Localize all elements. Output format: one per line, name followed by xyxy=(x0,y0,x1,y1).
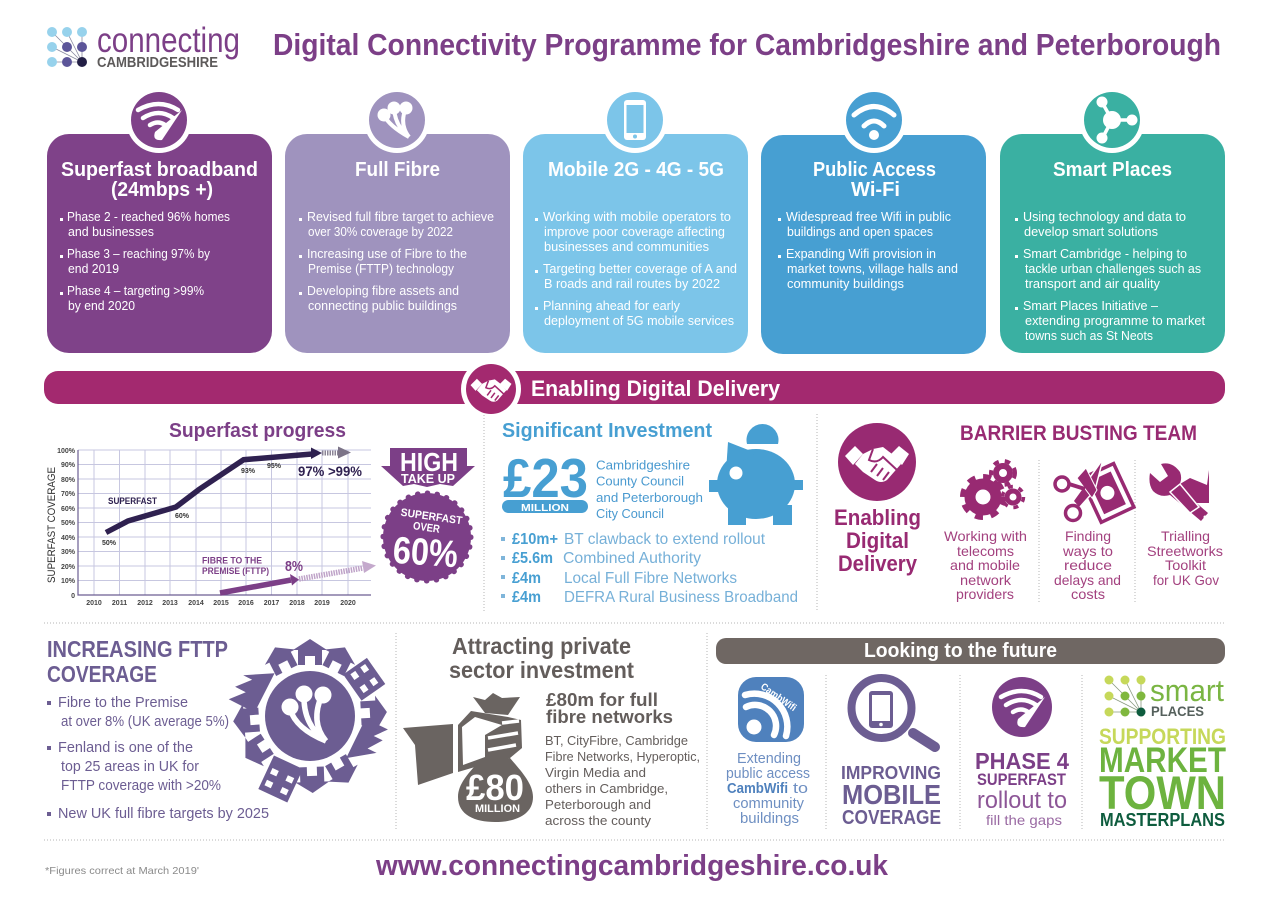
logo: connecting Cambridgeshire: connecting xyxy=(97,21,240,60)
icon: magnifier over phone xyxy=(852,678,935,747)
icon: hand holding money bag xyxy=(403,693,533,822)
panel: public access wi-fi xyxy=(761,87,986,354)
data labels: PREMISE (FTTP) xyxy=(202,566,269,576)
text: trialling streetworks: Streetworks xyxy=(1147,543,1223,559)
line chart: superfast and FTTP coverage xyxy=(46,446,376,607)
heading: superfast broadband: (24mbps +) xyxy=(111,179,213,201)
heading: full fibre: Full Fibre xyxy=(355,159,440,181)
bullet list: wi-fi: community buildings xyxy=(787,277,904,291)
axis labels: 60% xyxy=(61,506,76,513)
panel: mobile xyxy=(523,87,748,353)
data labels: 50% xyxy=(102,540,117,547)
axis labels: 90% xyxy=(61,462,76,469)
bullet list: wi-fi: market towns, village halls and xyxy=(787,262,958,276)
axis labels: 70% xyxy=(61,491,76,498)
text: working with telecoms: network xyxy=(960,572,1012,588)
heading: mobile: Mobile 2G - 4G - 5G xyxy=(548,159,724,181)
heading: barrier busting team: BARRIER BUSTING TEAM xyxy=(960,422,1197,445)
icon: wifi xyxy=(841,87,907,153)
icon: cambwifi: CambWifi xyxy=(758,681,798,714)
bullet list: smart places: Smart Cambridge - helping to xyxy=(1023,247,1187,261)
bullet list: superfast: Phase 3 – reaching 97% by xyxy=(67,247,211,261)
text: private investors: Peterborough and xyxy=(545,798,651,812)
FTTP line xyxy=(220,561,376,593)
bullet list: FTTP xyxy=(47,694,269,822)
badge: superfast over 60%: SUPERFAST xyxy=(400,507,463,527)
icon: hand holding money bag: £80 xyxy=(466,767,524,808)
line chart: superfast and FTTP coverage: 2018 xyxy=(289,600,305,607)
axis labels: 40% xyxy=(61,535,76,542)
panel: cambwifi xyxy=(726,677,810,827)
axis labels: 80% xyxy=(61,477,76,484)
callout: high take up: TAKE UP xyxy=(401,471,455,486)
icon: wrench and hand xyxy=(1149,463,1209,521)
line chart: superfast and FTTP coverage: 2017 xyxy=(264,600,279,607)
text: extending public access: buildings xyxy=(740,811,799,827)
icon: gears xyxy=(963,461,1024,517)
text: supporting market town masterplans: MASTERPLANS xyxy=(1100,810,1225,830)
heading: public access wi-fi xyxy=(813,159,936,201)
data labels: FIBRE TO THE xyxy=(202,556,262,566)
line chart: superfast and FTTP coverage: 2016 xyxy=(238,600,254,607)
text: finding ways: costs xyxy=(1071,586,1105,602)
bullet list: smart places: Using technology and data to xyxy=(1023,210,1186,224)
text: councils: and Peterborough xyxy=(596,491,703,505)
list: funding sources: BT clawback to extend rollout xyxy=(564,531,766,548)
heading: attracting private investment xyxy=(449,633,634,683)
text: private investors xyxy=(545,734,700,828)
line chart: superfast and FTTP coverage: 2015 xyxy=(213,600,229,607)
icon: superfast speedometer wifi xyxy=(126,87,192,153)
text: private investors: others in Cambridge, xyxy=(545,782,668,796)
axis labels: 100% xyxy=(57,448,76,455)
heading: public access wi-fi: Public Access xyxy=(813,159,936,181)
data labels: 60% xyxy=(175,513,190,520)
text: extending public access xyxy=(726,751,810,827)
panel: smart places market towns xyxy=(1099,673,1226,830)
bullet list: full fibre: connecting public buildings xyxy=(308,299,457,313)
banner: enabling digital delivery: Enabling Digital Delivery xyxy=(531,376,781,401)
bullet list: mobile: deployment of 5G mobile services xyxy=(544,314,734,328)
bullet list: mobile: businesses and communities xyxy=(544,240,709,254)
text: supporting market town masterplans: MARKET xyxy=(1099,741,1226,780)
text: private investors: Virgin Media and xyxy=(545,766,646,780)
bullet list: FTTP: Fenland is one of the xyxy=(58,739,193,756)
line chart: superfast and FTTP coverage: 2019 xyxy=(314,600,330,607)
text: working with telecoms: Working with xyxy=(944,528,1027,544)
heading: superfast broadband: Superfast broadband xyxy=(61,159,258,181)
heading: public access wi-fi: Wi-Fi xyxy=(851,179,900,201)
text: improving mobile coverage: IMPROVING xyxy=(841,763,941,783)
badge: superfast over 60%: OVER xyxy=(412,520,441,536)
list: funding sources: Local Full Fibre Networks xyxy=(564,570,737,587)
text: trialling streetworks xyxy=(1147,528,1223,588)
text: supporting market town masterplans: TOWN xyxy=(1099,766,1226,819)
bullet list: superfast: by end 2020 xyxy=(68,299,135,313)
website url: www.connectingcambridgeshire.co.uk xyxy=(375,850,889,882)
bullet list: smart places: extending programme to market xyxy=(1025,314,1206,328)
text: phase 4 rollout: fill the gaps xyxy=(986,812,1062,828)
subheading: 80m for full fibre: £80m for full xyxy=(546,690,658,710)
bullet list: full fibre: Developing fibre assets and xyxy=(307,284,459,298)
bullet list: smart places xyxy=(1015,210,1206,343)
text: finding ways: delays and xyxy=(1054,572,1121,588)
bullet list: full fibre xyxy=(299,210,494,313)
text: councils: City Council xyxy=(596,507,664,521)
text: phase 4 rollout: PHASE 4 xyxy=(975,748,1069,774)
bullet list: superfast: Phase 2 - reached 96% homes xyxy=(67,210,230,224)
text: improving mobile coverage: MOBILE xyxy=(842,779,941,810)
heading: increasing FTTP coverage: COVERAGE xyxy=(47,661,157,687)
bullet list: superfast: and businesses xyxy=(68,225,154,239)
heading: smart places: Smart Places xyxy=(1053,159,1172,181)
logo: connecting Cambridgeshire xyxy=(47,21,240,71)
text: enabling digital delivery: Enabling xyxy=(834,505,921,530)
text: working with telecoms: and mobile xyxy=(950,557,1020,573)
data labels: 97% >99% xyxy=(298,463,363,479)
bullet list: wi-fi: Widespread free Wifi in public xyxy=(786,210,951,224)
heading: increasing FTTP coverage: INCREASING FTTP xyxy=(47,636,228,662)
bullet list: full fibre: Revised full fibre target to achieve xyxy=(307,210,494,224)
text: extending public access: Extending xyxy=(737,751,801,767)
text: councils: Cambridgeshire xyxy=(596,458,690,472)
text: finding ways xyxy=(1054,528,1121,602)
axis labels: 50% xyxy=(61,520,76,527)
superfast line xyxy=(106,446,351,532)
text: councils: County Council xyxy=(596,474,684,488)
bullet list: FTTP: at over 8% (UK average 5%) xyxy=(61,713,229,730)
bullet list: mobile: Targeting better coverage of A and xyxy=(543,262,737,276)
bullet list: smart places: transport and air quality xyxy=(1025,277,1161,291)
text: finding ways: Finding xyxy=(1065,528,1111,544)
axis labels: 0 xyxy=(71,593,75,600)
bullet list: mobile xyxy=(535,210,737,328)
panel: increasing FTTP coverage xyxy=(47,636,388,822)
panel: significant investment xyxy=(501,420,803,606)
bullet list: wi-fi xyxy=(778,210,958,291)
text: councils xyxy=(596,458,703,521)
heading: significant investment: Significant Investment xyxy=(502,420,712,442)
line chart: superfast and FTTP coverage: 2013 xyxy=(162,600,178,607)
heading: attracting private investment: sector investment xyxy=(449,657,634,683)
callout: high take up xyxy=(381,447,475,487)
data labels: SUPERFAST xyxy=(108,496,157,507)
list: funding sources: £4m xyxy=(512,570,541,587)
text: extending public access: public access xyxy=(726,766,810,782)
bullet list: superfast: Phase 4 – targeting >99% xyxy=(67,284,204,298)
text: phase 4 rollout: SUPERFAST xyxy=(977,770,1067,789)
logo: smart places: PLACES xyxy=(1151,703,1204,719)
text: trialling streetworks: Trialling xyxy=(1161,528,1210,544)
icon: superfast speedometer xyxy=(992,677,1052,737)
bullet list: superfast: end 2019 xyxy=(68,262,119,276)
text: trialling streetworks: Toolkit xyxy=(1165,557,1206,573)
list: funding sources: £4m xyxy=(512,589,541,606)
bullet list: FTTP: FTTP coverage with >20% xyxy=(61,777,221,794)
text: private investors: Fibre Networks, Hyperoptic, xyxy=(545,750,700,764)
line chart: superfast and FTTP coverage: 2012 xyxy=(137,600,153,607)
list: funding sources: Combined Authority xyxy=(563,550,701,567)
heading: superfast progress: Superfast progress xyxy=(169,420,346,442)
text: finding ways: reduce xyxy=(1064,557,1112,573)
text: enabling digital delivery: Delivery xyxy=(838,551,918,576)
logo: connecting Cambridgeshire: CAMBRIDGESHIRE xyxy=(97,54,218,71)
bullet list: full fibre: over 30% coverage by 2022 xyxy=(308,225,453,239)
data labels: 95% xyxy=(267,463,282,470)
list: funding sources: DEFRA Rural Business Broadband xyxy=(564,589,798,606)
axis labels xyxy=(57,448,76,600)
text: trialling streetworks: for UK Gov xyxy=(1153,572,1219,588)
panel: smart places xyxy=(1000,87,1225,353)
icon: cambwifi xyxy=(738,677,804,742)
text: phase 4 rollout: rollout to xyxy=(977,787,1067,814)
icon: fibre hub with buildings xyxy=(229,639,388,803)
bullet list: full fibre: Premise (FTTP) technology xyxy=(308,262,455,276)
icon: smartphone xyxy=(602,87,668,153)
axis labels: 20% xyxy=(61,564,76,571)
line chart: superfast and FTTP coverage: 2011 xyxy=(112,600,127,607)
bullet list: FTTP: top 25 areas in UK for xyxy=(61,758,199,775)
text: phase 4 rollout xyxy=(975,748,1069,828)
icon: handshake badge xyxy=(461,359,521,419)
list: funding sources xyxy=(501,531,798,606)
text: enabling digital delivery: Digital xyxy=(846,528,909,553)
bullet list: full fibre: Increasing use of Fibre to the xyxy=(307,247,467,261)
bullet list: FTTP: Fibre to the Premise xyxy=(58,694,188,711)
figure: 23 million: £23 xyxy=(503,447,588,509)
data labels xyxy=(102,463,363,576)
heading: increasing FTTP coverage xyxy=(47,636,228,687)
text: extending public access: CambWifi xyxy=(727,781,788,797)
panel: phase 4 superfast xyxy=(975,677,1069,828)
badge: superfast over 60%: 60% xyxy=(391,530,459,576)
bullet list: wi-fi: buildings and open spaces xyxy=(787,225,933,239)
callout: high take up: HIGH xyxy=(400,447,458,477)
badge: superfast over 60% xyxy=(383,493,471,581)
list: funding sources: £5.6m xyxy=(512,550,553,567)
subheading: 80m for full fibre xyxy=(546,690,673,727)
bullet list: mobile: B roads and rail routes by 2022 xyxy=(544,277,720,291)
bullet list: wi-fi: Expanding Wifi provision in xyxy=(786,247,936,261)
text: finding ways: ways to xyxy=(1062,543,1113,559)
panel: superfast broadband xyxy=(47,87,272,353)
figure: 23 million: MILLION xyxy=(521,502,569,514)
banner: looking to the future xyxy=(716,638,1225,664)
axis labels: 30% xyxy=(61,549,76,556)
line chart: superfast and FTTP coverage: 2020 xyxy=(340,600,356,607)
text: extending public access: to xyxy=(793,781,808,797)
panel: attracting private sector investment xyxy=(403,633,700,828)
bullet list: smart places: towns such as St Neots xyxy=(1025,329,1153,343)
text: working with telecoms: providers xyxy=(956,586,1014,602)
line chart: superfast and FTTP coverage: 2014 xyxy=(188,600,204,607)
icon: hand holding money bag: MILLION xyxy=(475,803,520,815)
logo: smart places xyxy=(1104,673,1224,719)
icon: scissors cutting money xyxy=(1055,459,1134,522)
heading: superfast broadband xyxy=(61,159,258,201)
icon: handshake xyxy=(838,423,916,501)
data labels: 93% xyxy=(241,468,256,475)
icon: piggy bank xyxy=(709,424,803,525)
banner: enabling digital delivery xyxy=(44,359,1225,419)
bullet list: mobile: Working with mobile operators to xyxy=(543,210,731,224)
panel: barrier busting team xyxy=(944,422,1223,602)
bullet list: superfast xyxy=(60,210,230,313)
bullet list: smart places: Smart Places Initiative – xyxy=(1023,299,1158,313)
bullet list: mobile: Planning ahead for early xyxy=(543,299,681,313)
text: enabling digital delivery xyxy=(834,505,921,576)
data labels: 8% xyxy=(285,558,303,575)
text: extending public access: community xyxy=(733,796,805,812)
bullet list: FTTP: New UK full fibre targets by 2025 xyxy=(58,805,269,822)
text: improving mobile coverage: COVERAGE xyxy=(842,807,941,829)
text: improving mobile coverage xyxy=(841,763,941,829)
bullet list: smart places: develop smart solutions xyxy=(1024,225,1158,239)
icon: smart network nodes xyxy=(1079,87,1145,153)
panel: full fibre xyxy=(285,87,510,353)
panel: enabling digital delivery xyxy=(834,423,921,576)
text: supporting market town masterplans xyxy=(1099,724,1226,830)
line chart: superfast and FTTP coverage: SUPERFAST COVERAGE xyxy=(46,467,58,583)
bullet list: mobile: improve poor coverage affecting xyxy=(544,225,725,239)
text: working with telecoms xyxy=(944,528,1027,602)
text: supporting market town masterplans: SUPPORTING xyxy=(1099,724,1226,749)
panel: improving mobile coverage xyxy=(841,678,941,829)
text: private investors: BT, CityFibre, Cambridge xyxy=(545,734,688,748)
line chart: superfast and FTTP coverage: 2010 xyxy=(86,600,102,607)
icon: fibre strands xyxy=(364,87,430,153)
text: working with telecoms: telecoms xyxy=(957,543,1014,559)
text: private investors: across the county xyxy=(545,814,652,828)
axis labels: 10% xyxy=(61,578,76,585)
footnote: *Figures correct at March 2019' xyxy=(45,865,199,877)
list: funding sources: £10m+ xyxy=(512,531,558,548)
banner: looking to the future: Looking to the future xyxy=(864,640,1057,662)
bullet list: smart places: tackle urban challenges such as xyxy=(1025,262,1201,276)
heading: attracting private investment: Attracting private xyxy=(452,633,631,659)
logo: smart places: smart xyxy=(1150,673,1224,708)
subheading: 80m for full fibre: fibre networks xyxy=(546,707,673,727)
